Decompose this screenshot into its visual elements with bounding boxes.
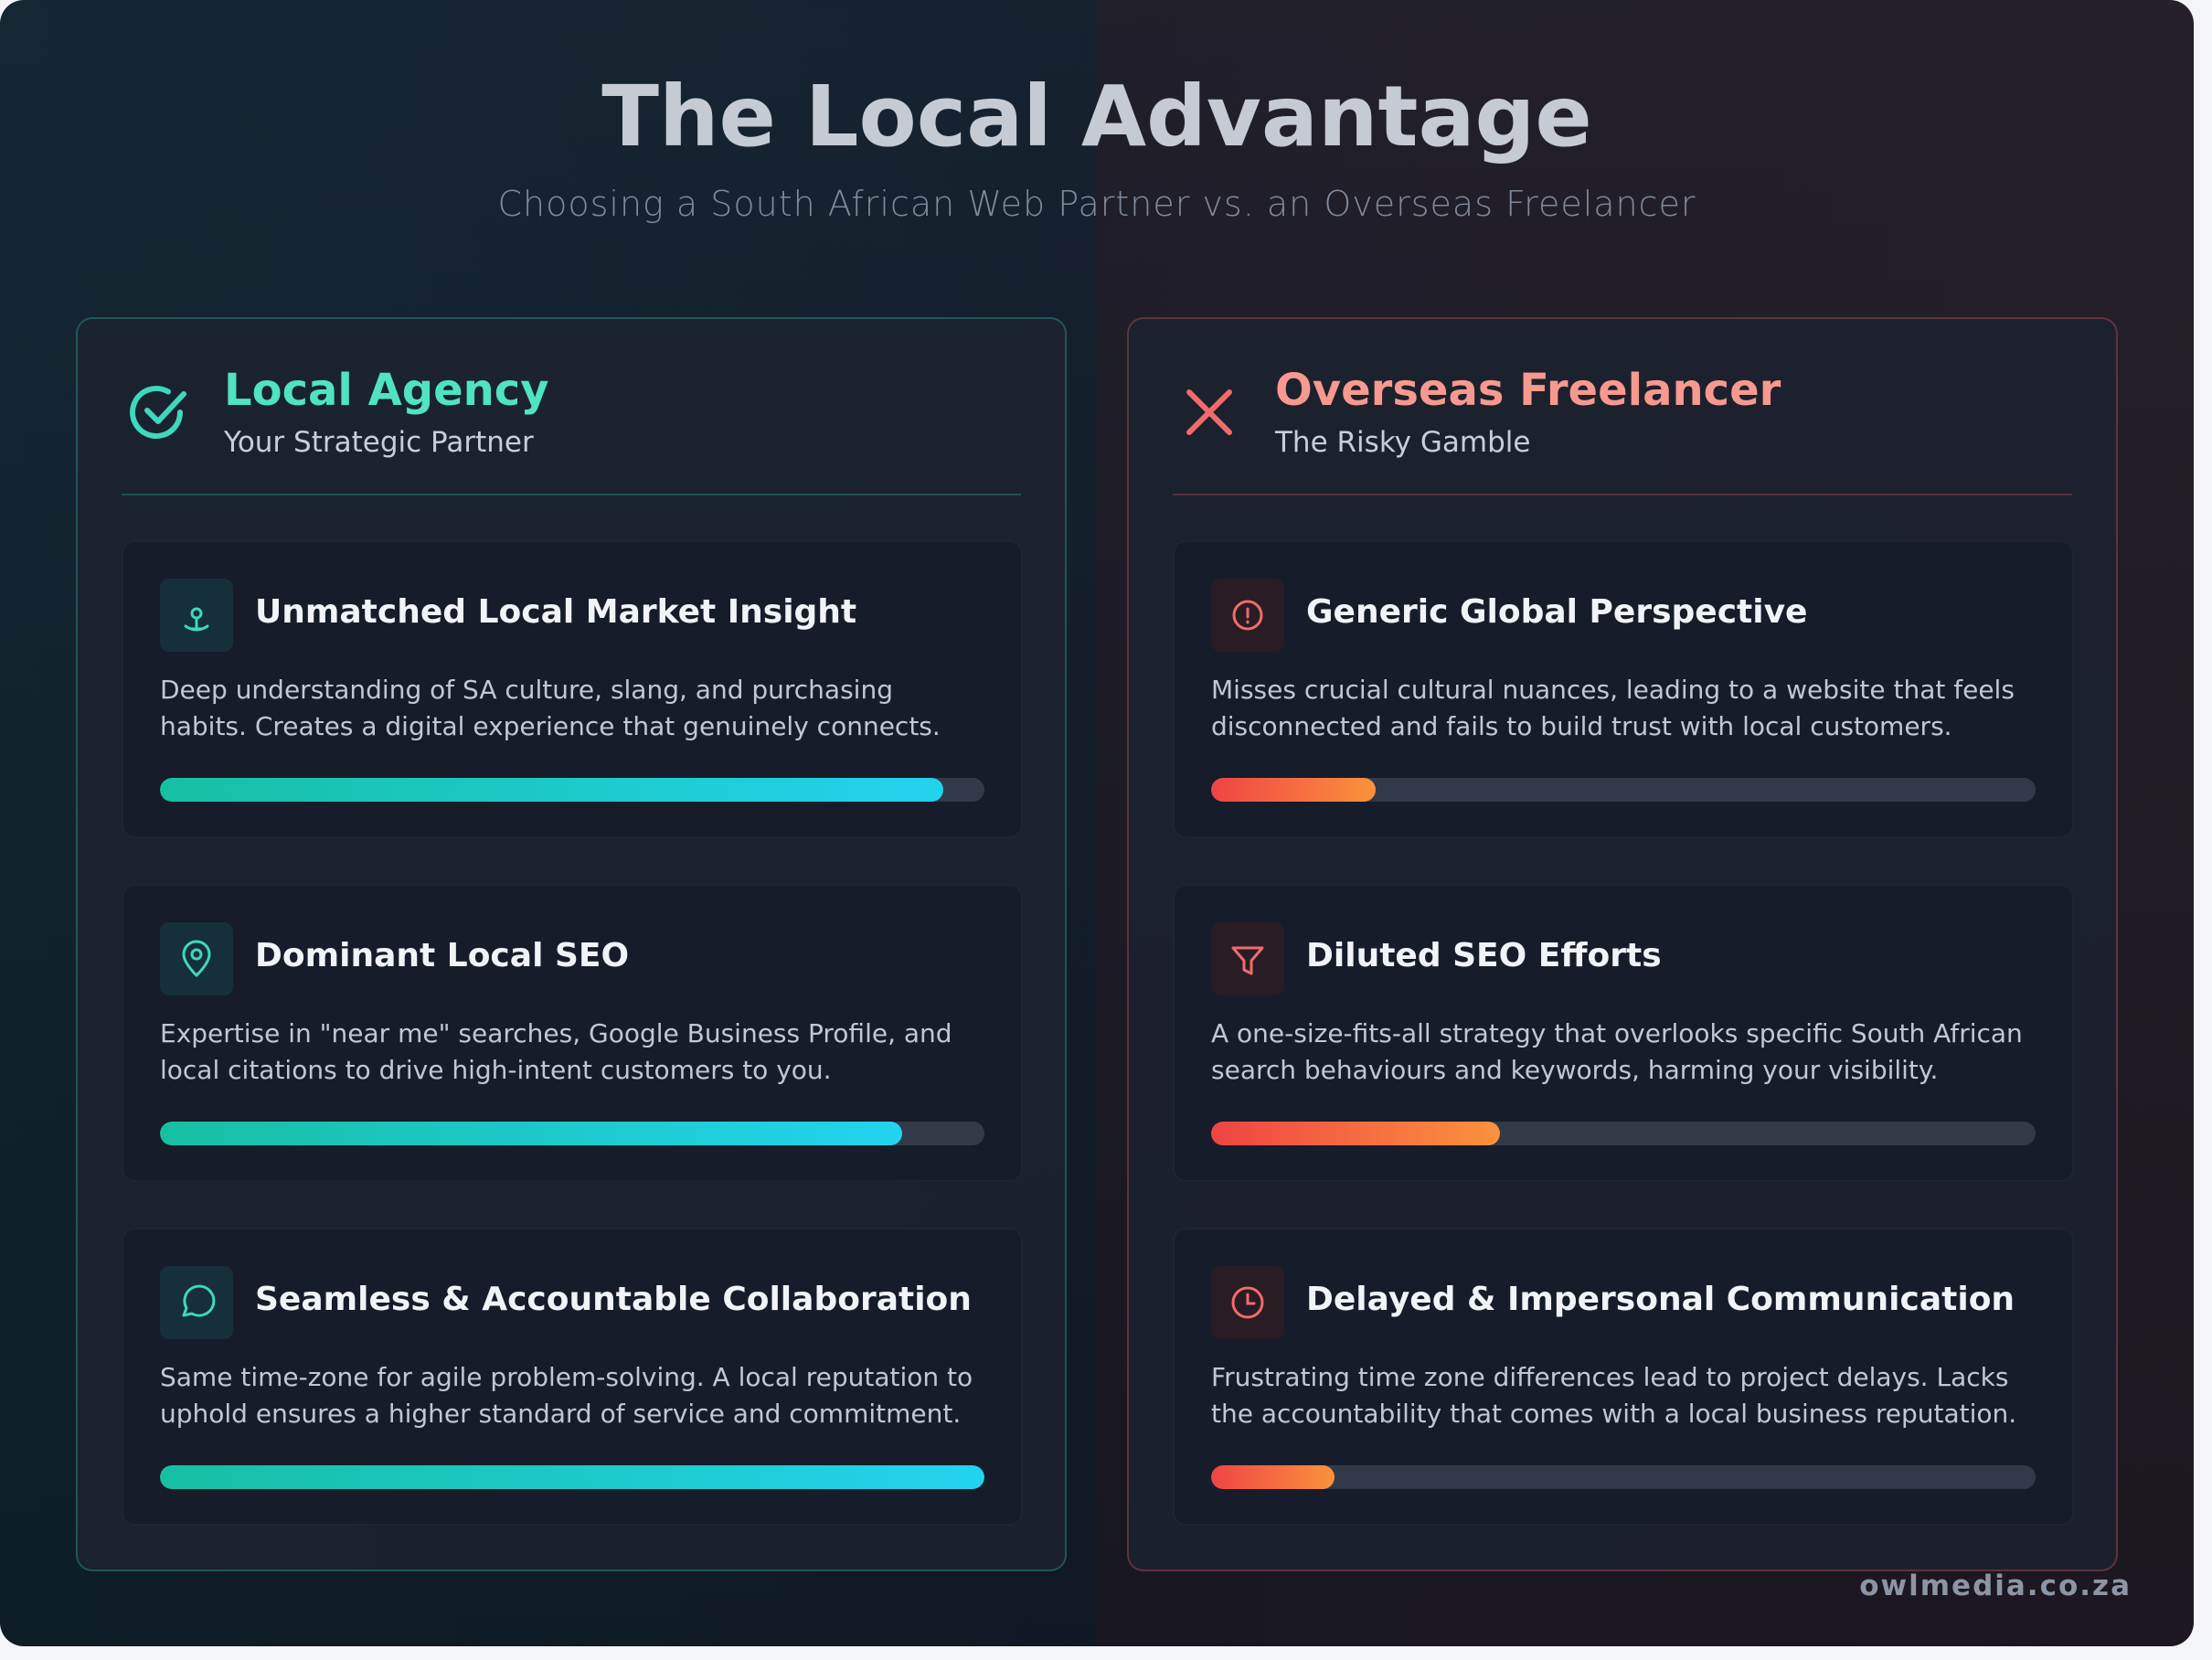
watermark: owlmedia.co.za [1859,1570,2132,1602]
card: communication [1173,1228,2074,1526]
subtitle: Choosing a South African Web Partner vs. an Overseas Freelancer [497,184,1696,224]
bar 35% [1211,1122,2036,1145]
heading: Overseas Freelancer: Overseas Freelancer [1275,365,1781,416]
bar 95% [160,778,984,802]
card title: Unmatched Local Market Insight [255,593,856,631]
card title: Diluted SEO Efforts [1306,937,1662,974]
card title: Seamless & Accountable Collaboration [255,1281,972,1318]
icon: person pin [160,579,233,652]
card: collaboration [122,1228,1023,1526]
card: local SEO [122,884,1023,1182]
card title: Dominant Local SEO [255,937,629,974]
card: global perspective [1173,540,2074,838]
bar 100% [160,1465,984,1489]
icon: X [1186,389,1232,435]
icon: check circle [130,386,186,439]
icon: clock [1211,1266,1284,1339]
icon: chat bubble [160,1266,233,1339]
panel: local agency [76,317,1067,1571]
bar 15% [1211,1465,2036,1489]
card: diluted SEO [1173,884,2074,1182]
card text: Deep understanding of SA culture, slang, and purchasing habits. Creates a digital experience that genuinely connects. [160,675,941,741]
subheading: The Risky Gamble [1275,426,1530,459]
card text: Frustrating time zone differences lead to project delays. Lacks the accountability that comes with a local business reputation. [1211,1362,2016,1429]
subheading: Your Strategic Partner [224,426,534,459]
card text: Same time-zone for agile problem-solving. A local reputation to uphold ensures a higher standard of service and commitment. [160,1362,973,1429]
card: local market insight [122,540,1023,838]
bar 90% [160,1122,984,1145]
icon: funnel [1211,922,1284,995]
card text: A one-size-fits-all strategy that overlooks specific South African search behaviours and keywords, harming your visibility. [1211,1018,2023,1085]
bar 20% [1211,778,2036,802]
panel: overseas freelancer [1127,317,2118,1571]
card text: Expertise in "near me" searches, Google Business Profile, and local citations to drive high-intent customers to you. [160,1018,952,1085]
heading: Local Agency: Local Agency [224,365,549,416]
card text: Misses crucial cultural nuances, leading to a website that feels disconnected and fails to build trust with local customers. [1211,675,2015,741]
card title: Delayed & Impersonal Communication [1306,1281,2015,1318]
title: The Local Advantage [601,68,1592,165]
icon: map pin [160,922,233,995]
card title: Generic Global Perspective [1306,593,1807,631]
icon: alert [1211,579,1284,652]
